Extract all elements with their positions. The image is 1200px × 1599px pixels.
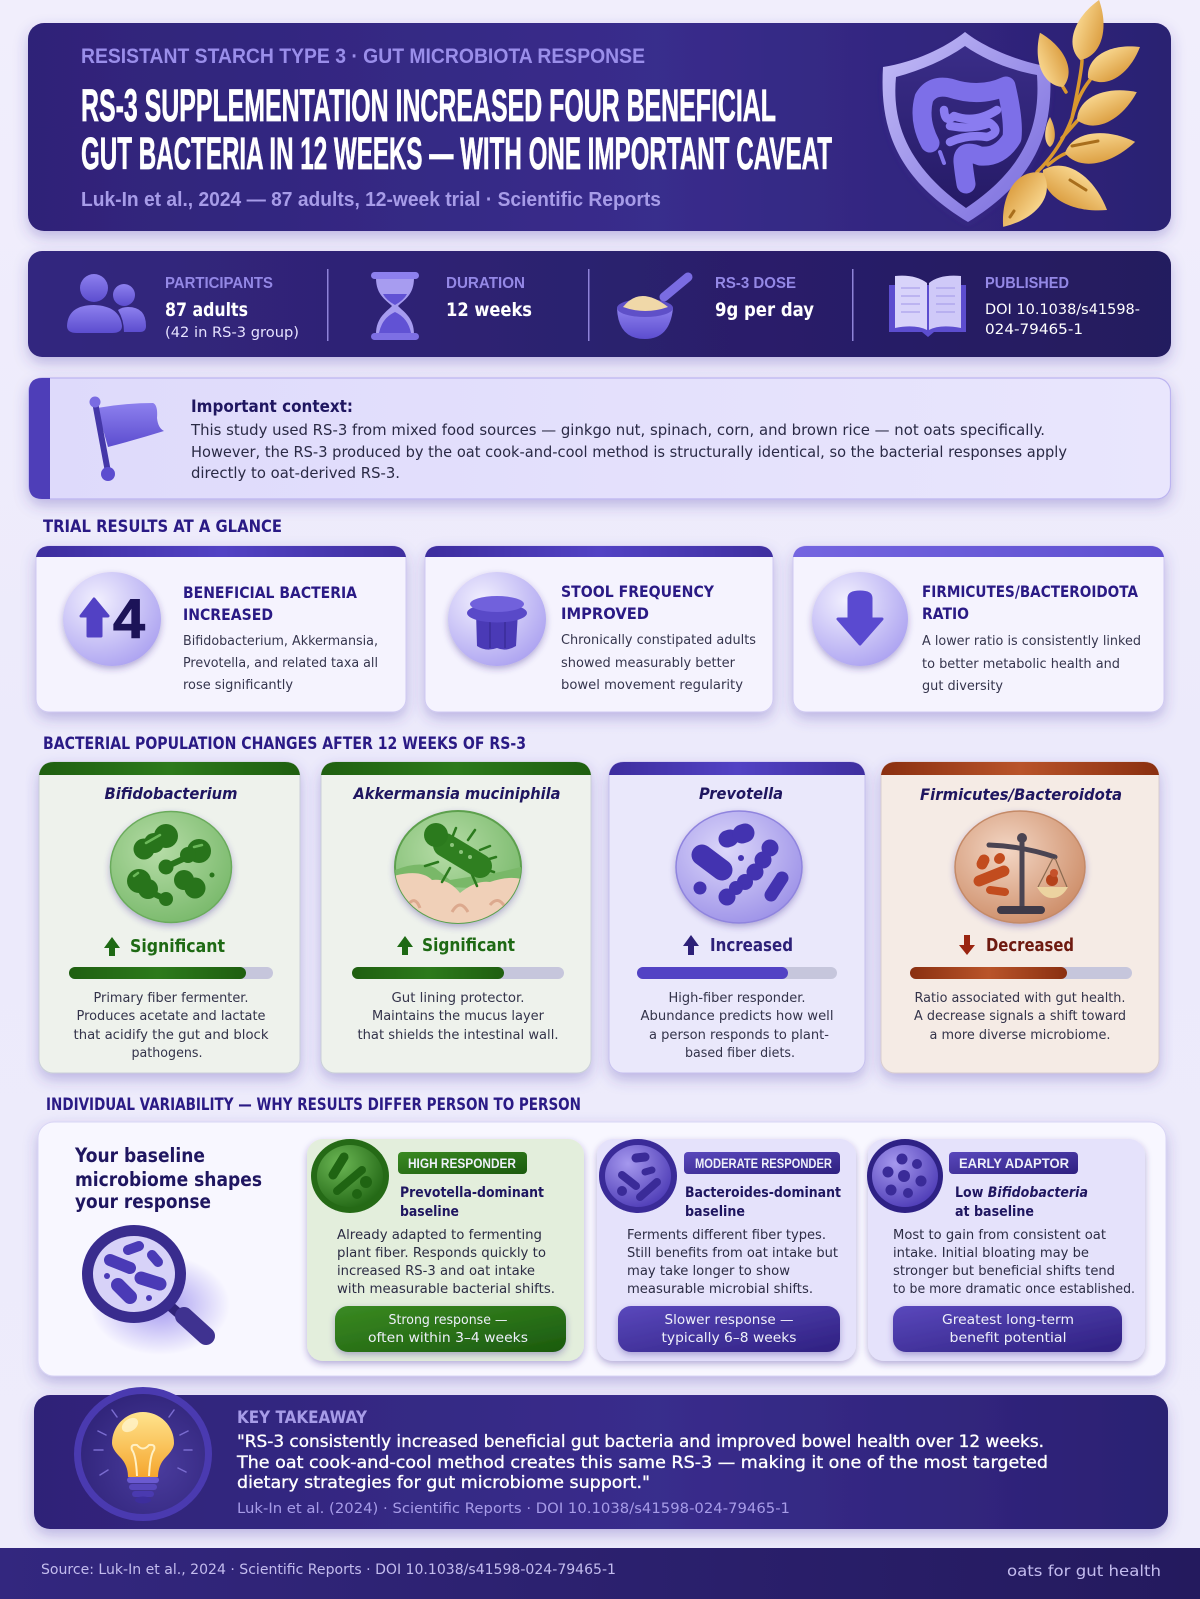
card: F/B ratio: to better metabolic health and <box>922 657 1120 672</box>
footer: Source: Luk-In et al., 2024 · Scientific Reports · DOI 10.1038/s41598-024-79465-1 <box>41 1562 616 1578</box>
card: F/B ratio: RATIO <box>922 604 969 623</box>
card: moderate responder: baseline <box>685 1204 745 1220</box>
card: moderate responder: may take longer to show <box>627 1264 790 1279</box>
card: Bifidobacterium: pathogens. <box>132 1046 202 1061</box>
card: stool frequency: IMPROVED <box>561 604 649 623</box>
card: Bifidobacterium: Primary fiber fermenter. <box>94 991 248 1006</box>
card: Akkermansia: Gut lining protector. <box>392 991 524 1006</box>
quote: The oat cook-and-cool method creates this same RS-3 — making it one of the most targeted <box>236 1453 1048 1473</box>
card: Bifidobacterium <box>39 762 300 1073</box>
icon: shield with intestine <box>883 32 1051 222</box>
panel: key takeaway <box>34 1387 1168 1529</box>
response button: often within 3–4 weeks <box>368 1331 528 1346</box>
progress bar <box>637 967 837 979</box>
status: decreased: Decreased <box>986 935 1074 956</box>
card: F/B ratio <box>793 546 1164 712</box>
icon: purple bacteria disc <box>599 1139 677 1213</box>
stat: dose: RS-3 DOSE <box>715 275 796 292</box>
response button: typically 6–8 weeks <box>662 1331 797 1346</box>
card: Firmicutes/Bacteroidota: Ratio associated with gut health. <box>914 991 1126 1006</box>
badge <box>398 1152 527 1174</box>
heading: individual variability: INDIVIDUAL VARIABILITY — WHY RESULTS DIFFER PERSON TO PERSON <box>46 1095 581 1114</box>
stat: duration: 12 weeks <box>446 299 532 321</box>
icon: scoop <box>617 277 688 339</box>
panel heading: Your baseline <box>74 1144 205 1167</box>
card: high responder: Prevotella-dominant <box>400 1185 544 1201</box>
card: stool frequency: bowel movement regularity <box>561 678 743 693</box>
stat: published <box>889 275 1140 338</box>
card: Prevotella <box>609 762 865 1073</box>
response button: Slower response — <box>664 1313 794 1328</box>
card: moderate responder: Still benefits from oat intake but <box>627 1246 838 1261</box>
icon: akkermansia on gut lining <box>390 811 525 930</box>
card: beneficial bacteria: INCREASED <box>183 605 273 624</box>
panel heading: microbiome shapes <box>75 1168 262 1191</box>
callout: important context: Important context: <box>191 397 353 417</box>
badge: HIGH RESPONDER <box>408 1156 516 1171</box>
stat: duration <box>371 272 532 340</box>
card: beneficial bacteria: rose significantly <box>183 678 293 693</box>
icon: dotted disc <box>867 1139 943 1213</box>
citation line: Luk-In et al., 2024 — 87 adults, 12-week trial · Scientific Reports <box>81 189 661 211</box>
status: significant: Significant <box>422 935 515 956</box>
icon: down arrow <box>812 572 908 666</box>
stat: dose <box>617 275 815 339</box>
card: early adaptor: stronger but beneficial shifts tend <box>893 1264 1115 1279</box>
icon: people <box>67 274 146 333</box>
card: high responder: baseline <box>400 1204 459 1220</box>
panel: individual variability <box>38 1122 1166 1376</box>
heading: bacterial population changes: BACTERIAL POPULATION CHANGES AFTER 12 WEEKS OF RS-3 <box>43 734 526 753</box>
icon: lightbulb <box>74 1387 212 1521</box>
callout: important context: directly to oat-derived RS-3. <box>191 464 400 482</box>
card: Bifidobacterium: that acidify the gut and block <box>74 1028 269 1043</box>
stat: duration: DURATION <box>446 275 525 292</box>
icon: balance scale <box>955 811 1085 923</box>
card: early adaptor: intake. Initial bloating may be <box>893 1246 1089 1261</box>
card: early adaptor: at baseline <box>955 1204 1034 1220</box>
response button: Greatest long-term <box>942 1313 1074 1328</box>
callout: important context <box>28 378 1170 499</box>
icon: green bacteria disc <box>311 1139 389 1213</box>
card: early adaptor: Most to gain from consistent oat <box>893 1228 1106 1243</box>
badge <box>949 1152 1078 1174</box>
panel: key takeaway: Luk-In et al. (2024) · Scientific Reports · DOI 10.1038/s41598-024-79465-1 <box>237 1501 790 1517</box>
status: decreased <box>959 935 1074 956</box>
progress bar <box>352 967 564 979</box>
footer: oats for gut health <box>1007 1562 1161 1580</box>
icon: stool column <box>448 572 546 666</box>
stat: participants <box>67 274 299 341</box>
stat: published: 024-79465-1 <box>985 322 1083 338</box>
card: F/B ratio: A lower ratio is consistently linked <box>922 634 1141 649</box>
quote: "RS-3 consistently increased beneficial gut bacteria and improved bowel health over 12 weeks. <box>237 1432 1044 1452</box>
card: beneficial bacteria: BENEFICIAL BACTERIA <box>183 583 358 602</box>
card: early adaptor <box>867 1139 1145 1361</box>
card: stool frequency: STOOL FREQUENCY <box>561 582 714 601</box>
card: stool frequency <box>425 546 773 712</box>
response button: benefit potential <box>950 1331 1066 1346</box>
card: beneficial bacteria: Prevotella, and related taxa all <box>183 656 378 671</box>
response button <box>893 1306 1122 1352</box>
stat: dose: 9g per day <box>715 299 815 321</box>
header banner <box>28 0 1171 237</box>
card: stool frequency: showed measurably better <box>561 656 736 671</box>
card: Prevotella: Prevotella <box>699 784 783 803</box>
card: Firmicutes/Bacteroidota <box>881 762 1159 1073</box>
response button: Strong response — <box>388 1313 508 1328</box>
card: Prevotella: Abundance predicts how well <box>640 1009 834 1024</box>
card: high responder <box>307 1139 584 1361</box>
card: Bifidobacterium: Bifidobacterium <box>104 784 238 803</box>
card: beneficial bacteria <box>36 546 406 712</box>
card: Akkermansia: that shields the intestinal wall. <box>358 1028 558 1043</box>
card: Akkermansia <box>321 762 591 1073</box>
card: Akkermansia: Maintains the mucus layer <box>372 1009 545 1024</box>
card: Akkermansia: Akkermansia muciniphila <box>352 784 560 803</box>
quote <box>236 1432 1048 1493</box>
status: significant <box>397 935 515 956</box>
stat: published: DOI 10.1038/s41598- <box>985 302 1140 318</box>
card: F/B ratio: FIRMICUTES/BACTEROIDOTA <box>922 582 1139 601</box>
panel heading: your response <box>75 1190 211 1213</box>
icon: magnifying glass <box>82 1225 230 1355</box>
icon: hourglass <box>371 272 419 340</box>
card: moderate responder: Ferments different fiber types. <box>627 1228 826 1243</box>
icon: golden oat sprig <box>989 0 1147 237</box>
panel heading <box>74 1144 262 1213</box>
card: high responder: with measurable bacterial shifts. <box>337 1282 555 1297</box>
stat: participants: (42 in RS-3 group) <box>165 325 299 341</box>
status: significant: Significant <box>130 936 225 957</box>
icon: bifidobacteria dish <box>110 812 232 922</box>
icon: prevotella dish <box>676 811 802 923</box>
card: high responder: Already adapted to fermenting <box>337 1228 542 1243</box>
badge: MODERATE RESPONDER <box>695 1156 832 1171</box>
status: increased: Increased <box>710 935 793 956</box>
card: stool frequency: Chronically constipated adults <box>561 633 756 648</box>
card: high responder: plant fiber. Responds quickly to <box>337 1246 546 1261</box>
icon: up arrow and 4 <box>63 572 161 666</box>
stat: participants: PARTICIPANTS <box>165 275 273 292</box>
panel: key takeaway: KEY TAKEAWAY <box>237 1408 368 1427</box>
stat: participants: 87 adults <box>165 299 248 321</box>
card: Firmicutes/Bacteroidota: A decrease signals a shift toward <box>914 1009 1126 1024</box>
quote: dietary strategies for gut microbiome support." <box>237 1473 650 1493</box>
card: Prevotella: based fiber diets. <box>685 1046 795 1061</box>
card: Prevotella: a person responds to plant- <box>649 1028 829 1043</box>
callout: important context: This study used RS-3 from mixed food sources — ginkgo nut, spinach, corn, and brown rice — not oats specifically. <box>190 421 1045 439</box>
title <box>81 80 832 179</box>
badge: EARLY ADAPTOR <box>959 1156 1069 1171</box>
badge <box>684 1152 840 1174</box>
response button <box>335 1306 566 1352</box>
progress bar <box>910 967 1132 979</box>
response button <box>618 1306 840 1352</box>
icon: flag <box>90 396 164 481</box>
card: moderate responder: Bacteroides-dominant <box>685 1185 841 1201</box>
callout: important context: However, the RS-3 produced by the oat cook-and-cool method is structurally identical, so the bacterial responses apply <box>191 443 1067 461</box>
card: Firmicutes/Bacteroidota: Firmicutes/Bacteroidota <box>920 785 1122 804</box>
card: moderate responder: measurable microbial shifts. <box>627 1282 813 1297</box>
icon: open book <box>889 276 966 337</box>
stat: published: PUBLISHED <box>985 275 1069 292</box>
header eyebrow: RESISTANT STARCH TYPE 3 · GUT MICROBIOTA RESPONSE <box>81 45 645 68</box>
card: Prevotella: High-fiber responder. <box>668 991 806 1006</box>
card: Firmicutes/Bacteroidota: a more diverse microbiome. <box>930 1028 1110 1043</box>
card: Bifidobacterium: Produces acetate and lactate <box>76 1009 266 1024</box>
card: early adaptor: to be more dramatic once established. <box>893 1282 1135 1297</box>
heading: trial results: TRIAL RESULTS AT A GLANCE <box>43 517 282 536</box>
icon: up arrow and 4: 4 <box>113 587 145 650</box>
card: high responder: increased RS-3 and oat intake <box>337 1264 535 1279</box>
card: moderate responder <box>597 1139 856 1361</box>
card: F/B ratio: gut diversity <box>922 679 1003 694</box>
status: increased <box>683 935 793 956</box>
stats bar <box>28 251 1171 357</box>
progress bar <box>69 967 273 979</box>
footer <box>0 1548 1200 1599</box>
card: beneficial bacteria: Bifidobacterium, Akkermansia, <box>183 634 378 649</box>
card: early adaptor: Low Bifidobacteria <box>955 1185 1088 1201</box>
